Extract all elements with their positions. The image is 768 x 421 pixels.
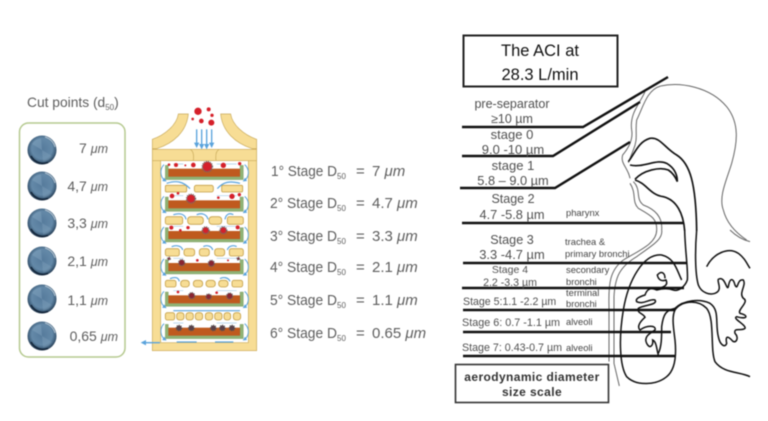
diagram: cascade impactor xyxy=(143,107,257,351)
stage 6: 6° Stage D xyxy=(270,325,337,342)
pre-separator label: ≥10 µm xyxy=(491,112,533,126)
inlet xyxy=(152,114,257,161)
stage 4: 50 xyxy=(337,268,346,277)
stage 5: 50 xyxy=(337,301,346,310)
stage 4 label: 2.2 -3.3 µm xyxy=(483,277,537,289)
cut point values: 1,1 μm xyxy=(67,292,108,308)
anatomy: head and airway xyxy=(622,85,747,240)
cut point values: 4,7 μm xyxy=(67,178,108,194)
lungs and bronchi xyxy=(620,230,750,384)
stage 4: 2.1 xyxy=(372,259,397,276)
airway region labels: alveoli xyxy=(566,342,593,353)
stage 1 label: 5.8 – 9.0 µm xyxy=(477,173,549,188)
inlet airflow arrows xyxy=(197,129,212,147)
title box: the ACI: 28.3 L/min xyxy=(501,66,579,84)
stage 4: 4° Stage D xyxy=(270,259,337,276)
icon: filter disc 4,7 xyxy=(28,172,56,200)
airway region labels: primary bronchi xyxy=(565,248,630,259)
mouth and throat xyxy=(628,138,697,231)
stage 4 label: Stage 4 xyxy=(492,264,528,276)
stage 3: 3° Stage D xyxy=(270,228,337,245)
pre-separator label xyxy=(474,97,550,126)
anatomy: trachea and lungs xyxy=(609,230,750,386)
icon: filter disc 3,3 xyxy=(28,208,56,238)
stage 4 label xyxy=(483,264,537,289)
pre-separator label: pre-separator xyxy=(474,97,550,111)
stage 3 label: 3.3 -4.7 µm xyxy=(479,247,545,262)
airway region labels: terminal xyxy=(566,287,599,298)
stage 2: = xyxy=(356,195,365,212)
cut point values: 0,65 μm xyxy=(70,328,118,344)
stage 2: 2° Stage D xyxy=(270,195,337,212)
stage labels xyxy=(462,97,562,354)
airway region labels xyxy=(565,207,630,353)
stage 3 label xyxy=(479,233,545,262)
cut point values: 3,3 μm xyxy=(67,215,108,231)
stage 5 label: Stage 5:1.1 -2.2 µm xyxy=(463,296,556,308)
nozzle plates xyxy=(165,185,243,320)
airway region labels: trachea & xyxy=(565,236,606,247)
stage 3: = xyxy=(356,228,365,245)
stage boundary lines xyxy=(460,77,687,356)
heading: cut points: Cut points (d xyxy=(27,95,105,110)
panel: cut points xyxy=(20,95,125,357)
airflow through stages xyxy=(143,182,240,343)
stage 6: 50 xyxy=(337,334,346,343)
icon: filter disc 1,1 xyxy=(28,284,56,314)
head outline xyxy=(622,85,747,240)
stage 3 label: Stage 3 xyxy=(490,233,534,247)
cut point values: 7 μm xyxy=(79,140,108,156)
cut point values: 2,1 μm xyxy=(67,253,108,269)
stage 0 label: stage 0 xyxy=(491,127,533,142)
heading: cut points: 50 xyxy=(105,103,115,112)
panel frame xyxy=(20,123,125,357)
stage 3: 3.3 xyxy=(372,228,397,245)
stage 4: μm xyxy=(396,259,418,276)
scale caption box xyxy=(456,364,608,402)
airway region labels: secondary xyxy=(566,264,610,275)
stage 2: 4.7 xyxy=(372,195,397,212)
stage 1: 50 xyxy=(337,172,346,181)
stage 0 label: 9.0 -10 µm xyxy=(482,142,544,157)
scale caption box: size scale xyxy=(502,385,562,399)
stage 5: μm xyxy=(396,292,418,309)
stage 2 label xyxy=(480,192,544,222)
stage 2 label: Stage 2 xyxy=(491,192,535,206)
stage 2 label: 4.7 -5.8 µm xyxy=(480,207,544,222)
stage 0 label xyxy=(482,127,544,157)
airway region labels: bronchi xyxy=(566,276,597,287)
airway region labels: pharynx xyxy=(566,207,600,218)
impactor body xyxy=(152,149,257,351)
chest outline lines xyxy=(609,230,750,386)
stage 7 label: Stage 7: 0.43-0.7 µm xyxy=(462,342,562,354)
stage 5: = xyxy=(356,292,365,309)
stage 3: 50 xyxy=(337,237,346,246)
scale caption box: aerodynamic diameter xyxy=(464,370,600,384)
stage 1: = xyxy=(356,163,365,180)
stage 6: 0.65 xyxy=(372,325,405,342)
cut point values xyxy=(67,140,118,344)
stage cut-off list xyxy=(270,163,426,343)
stage 2: μm xyxy=(396,195,418,212)
title box: the ACI xyxy=(464,36,618,86)
title box: the ACI: The ACI at xyxy=(501,42,579,60)
stage 1 label: stage 1 xyxy=(492,158,534,173)
airway region labels: alveoli xyxy=(566,316,593,327)
airway region labels: bronchi xyxy=(566,298,597,309)
stage 6 label: Stage 6: 0.7 -1.1 µm xyxy=(462,317,560,329)
stage 1: 7 xyxy=(372,163,385,180)
stage 5: 1.1 xyxy=(372,292,397,309)
icon: filter disc 7 xyxy=(28,136,56,164)
stage 4: = xyxy=(356,259,365,276)
stage 6: = xyxy=(356,325,365,342)
icon: filter disc 0,65 xyxy=(28,322,56,350)
collection plates xyxy=(161,164,248,181)
stage 1: 1° Stage D xyxy=(271,163,337,180)
stage 1 label xyxy=(477,158,549,188)
stage 1: μm xyxy=(384,163,405,180)
heading: cut points: ) xyxy=(114,95,119,110)
aerosol particles xyxy=(191,107,214,126)
stage 2: 50 xyxy=(337,204,346,213)
deposited particles with impact bursts xyxy=(187,162,227,234)
stage 6: μm xyxy=(404,325,426,342)
stage 3: μm xyxy=(396,228,418,245)
icon: filter disc 2,1 xyxy=(28,246,56,276)
stage 5: 5° Stage D xyxy=(270,292,337,309)
